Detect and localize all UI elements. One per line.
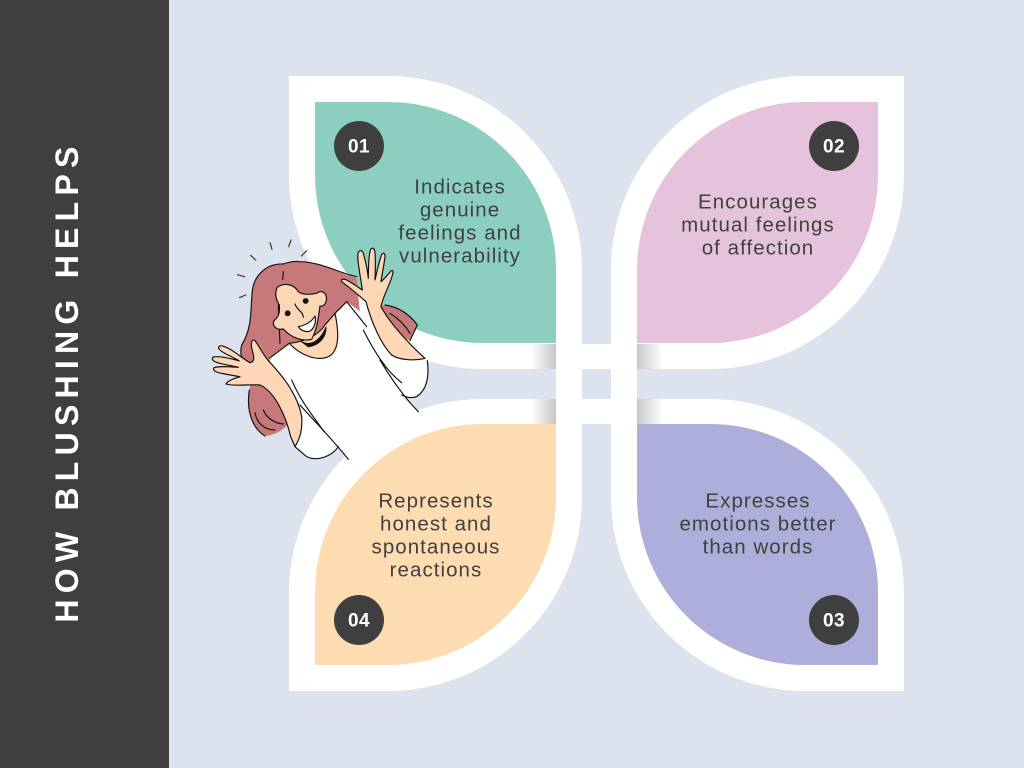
title: HOW BLUSHING HELPS bbox=[49, 140, 85, 623]
badge 01 bbox=[334, 121, 384, 171]
text 01: feelings and bbox=[398, 222, 522, 244]
text 04: Represents bbox=[378, 490, 494, 512]
text 01: Indicates bbox=[414, 176, 506, 198]
text 03: Expresses bbox=[705, 490, 811, 512]
badge 01: 01 bbox=[348, 136, 370, 158]
panel: 02 mutual affection bbox=[611, 76, 904, 369]
badge 03 bbox=[809, 595, 859, 645]
text 03: emotions better bbox=[679, 512, 837, 536]
text 04: honest and bbox=[380, 512, 492, 536]
surprise marks bbox=[237, 240, 307, 298]
text 01: vulnerability bbox=[399, 244, 521, 268]
text 02: Encourages bbox=[698, 190, 818, 214]
badge 03: 03 bbox=[823, 610, 845, 632]
badge 02: 02 bbox=[823, 136, 845, 158]
text 02: of affection bbox=[702, 236, 814, 260]
text 02: mutual feelings bbox=[681, 214, 835, 236]
text 04: spontaneous bbox=[372, 536, 500, 558]
panel: 03 expresses emotions bbox=[611, 399, 904, 691]
sidebar bbox=[0, 0, 169, 768]
text 04: reactions bbox=[390, 558, 482, 582]
badge 04 bbox=[334, 595, 384, 645]
left hand and arm bbox=[212, 340, 302, 447]
hair bbox=[241, 261, 417, 436]
shirt bbox=[269, 302, 428, 460]
badge 04: 04 bbox=[348, 610, 370, 632]
white connector frame bbox=[520, 300, 680, 470]
panel: 01 genuine feelings bbox=[289, 76, 582, 369]
face bbox=[273, 284, 327, 340]
badge 02 bbox=[809, 121, 859, 171]
choker bbox=[302, 327, 326, 347]
text 03: than words bbox=[703, 536, 813, 558]
right hand and arm bbox=[341, 248, 425, 360]
illustration: waving woman bbox=[212, 240, 428, 460]
text 01: genuine bbox=[420, 198, 500, 222]
panel: 04 honest reactions bbox=[289, 399, 582, 691]
neck bbox=[289, 313, 338, 358]
fold shadows bbox=[530, 344, 663, 424]
